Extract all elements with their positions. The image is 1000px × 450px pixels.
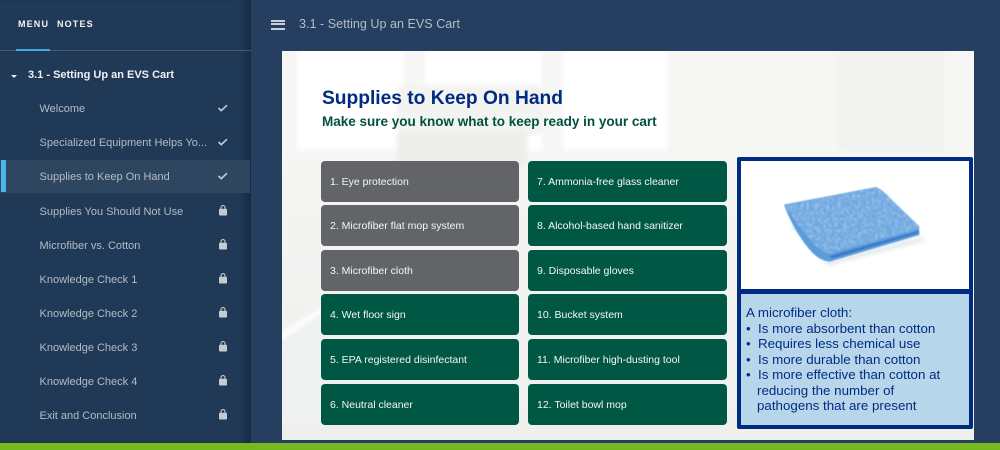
panel: microfiber cloth callout — [737, 157, 973, 429]
menu item: Exit and Conclusion: Exit and Conclusion — [40, 410, 137, 422]
section heading: 3.1 - Setting Up an EVS Cart — [28, 69, 174, 81]
slide subtitle: Make sure you know what to keep ready in your cart — [322, 114, 657, 129]
top face — [784, 187, 920, 254]
text box: microfiber benefits: pathogens that are present — [757, 398, 916, 413]
menu item: Welcome: Welcome — [40, 103, 85, 115]
supply button 10 — [528, 294, 727, 335]
text box: microfiber benefits: • — [746, 367, 751, 382]
faded room background photo — [282, 51, 974, 440]
menu item: Knowledge Check 1: Knowledge Check 1 — [40, 274, 137, 286]
menu item: Microfiber vs. Cotton — [40, 239, 227, 252]
text box: microfiber benefits: Is more effective than cotton at — [758, 367, 940, 382]
lower fold — [784, 205, 920, 262]
supply button 10: 10. Bucket system — [537, 309, 623, 321]
top bar title: 3.1 - Setting Up an EVS Cart — [299, 17, 460, 31]
menu item: Supplies You Should Not Use: Supplies You Should Not Use — [40, 206, 183, 218]
text box: microfiber benefits: Is more absorbent than cotton — [758, 320, 935, 336]
supply button 8 — [528, 205, 727, 246]
menu item: Supplies to Keep On Hand (active): Supplies to Keep On Hand — [40, 171, 170, 183]
menu item: Welcome — [40, 103, 228, 115]
supply button 5: 5. EPA registered disinfectant — [330, 354, 467, 366]
supply button 11 — [528, 339, 727, 380]
icon: hamburger menu — [271, 20, 285, 30]
text box: microfiber benefits: Is more durable than cotton — [758, 352, 920, 366]
supply button 3: 3. Microfiber cloth — [330, 265, 413, 277]
text box: microfiber benefits — [741, 294, 969, 425]
tab: notes: NOTES — [57, 19, 94, 29]
bottom green bar — [0, 443, 1000, 450]
supply button 9 — [528, 250, 727, 291]
text box: microfiber benefits: • — [746, 336, 751, 351]
text box: microfiber benefits: reducing the number of — [757, 382, 894, 398]
supply button 7: 7. Ammonia-free glass cleaner — [537, 176, 679, 188]
supply button 8: 8. Alcohol-based hand sanitizer — [537, 220, 683, 232]
supply button 6: 6. Neutral cleaner — [330, 399, 413, 411]
supply button 3 — [321, 250, 519, 291]
menu item: Microfiber vs. Cotton: Microfiber vs. Cotton — [40, 240, 140, 252]
supply button 4: 4. Wet floor sign — [330, 309, 406, 321]
menu item: Knowledge Check 2 — [40, 307, 227, 320]
icon: collapse arrow — [11, 75, 17, 78]
supply button 12 — [528, 384, 727, 425]
supply button 2 — [321, 205, 519, 246]
supply button 5 — [321, 339, 519, 380]
menu item: Exit and Conclusion — [40, 409, 227, 422]
sidebar — [0, 0, 251, 443]
photo: blue microfiber cloth — [741, 161, 969, 289]
text box: microfiber benefits: • — [746, 320, 751, 336]
supply button 4 — [321, 294, 519, 335]
supply button 6 — [321, 384, 519, 425]
supply button 1: 1. Eye protection — [330, 176, 409, 188]
menu item: Knowledge Check 4 — [40, 375, 227, 388]
menu item: Knowledge Check 3 — [40, 341, 227, 354]
menu item: Supplies to Keep On Hand (active) — [0, 160, 250, 193]
menu item: Specialized Equipment: Specialized Equipment Helps Yo... — [40, 137, 207, 149]
menu item: Knowledge Check 3: Knowledge Check 3 — [40, 342, 137, 354]
text box: microfiber benefits: Requires less chemical use — [758, 336, 920, 351]
menu item: Knowledge Check 1 — [40, 273, 227, 286]
soft shadow — [793, 225, 923, 263]
text box: microfiber benefits: • — [746, 352, 751, 366]
active tab indicator — [16, 49, 50, 51]
supply button 7 — [528, 161, 727, 202]
slide title: Supplies to Keep On Hand — [322, 88, 563, 109]
menu item: Knowledge Check 2: Knowledge Check 2 — [40, 308, 137, 320]
tab divider — [0, 50, 251, 51]
menu item: Knowledge Check 4: Knowledge Check 4 — [40, 376, 137, 388]
supply button 11: 11. Microfiber high-dusting tool — [537, 354, 680, 366]
tab: menu: MENU — [18, 19, 49, 29]
supply button 2: 2. Microfiber flat mop system — [330, 220, 464, 232]
supply button 12: 12. Toilet bowl mop — [537, 399, 627, 411]
slide — [282, 51, 974, 440]
text box: microfiber benefits: A microfiber cloth: — [746, 305, 852, 320]
supply button 1 — [321, 161, 519, 202]
supply button 9: 9. Disposable gloves — [537, 265, 634, 277]
